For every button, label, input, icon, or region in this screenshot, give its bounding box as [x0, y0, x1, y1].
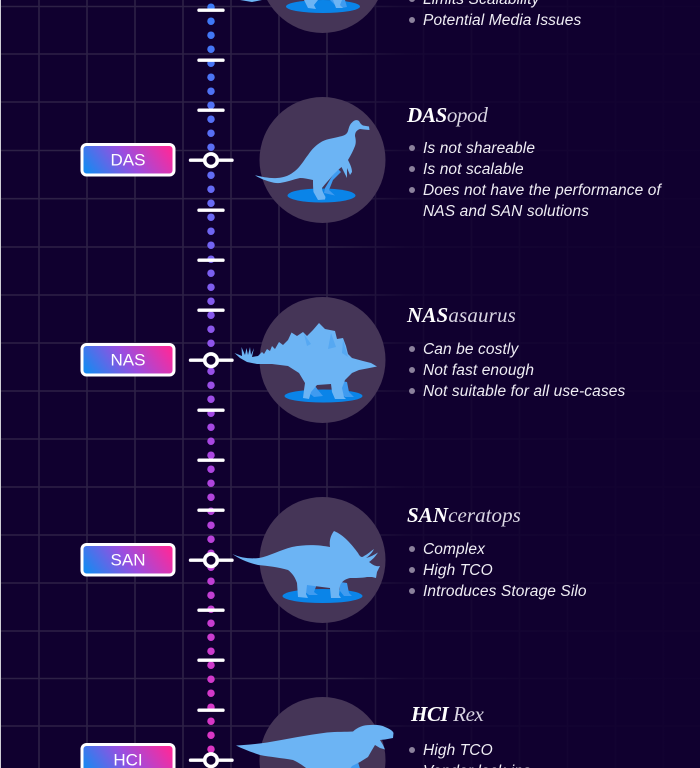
text: HCI Rex [409, 702, 531, 768]
label: DAS: DAS [111, 150, 145, 170]
text: NASasaurus: Not fast enough [423, 362, 534, 379]
label: NAS: NAS [111, 350, 145, 370]
icon: partial dinosaur at top [240, 0, 386, 33]
heading: SANceratops: SANceratops [407, 503, 521, 527]
label: HCI [82, 744, 174, 768]
icon: HCI dinosaur [236, 697, 394, 768]
timeline [190, 7, 232, 768]
text: SANceratops: Complex [423, 541, 486, 558]
text: SANceratops: Introduces Storage Silo [423, 583, 587, 600]
text: top entry tail [409, 0, 582, 29]
icon: NAS dinosaur [234, 297, 386, 423]
text: NASasaurus [406, 303, 625, 400]
text: DASopod: Does not have the performance of [423, 182, 662, 199]
label: NAS [82, 344, 174, 375]
icon: DAS dinosaur [255, 97, 386, 223]
label: DAS [82, 144, 174, 175]
heading: HCI Rex: HCI Rex [410, 702, 485, 726]
text: NASasaurus: Can be costly [423, 341, 519, 358]
text: NASasaurus: Not suitable for all use-cases [423, 383, 625, 400]
text: SANceratops: High TCO [423, 562, 493, 579]
text: DASopod: NAS and SAN solutions [423, 203, 589, 220]
marker: NAS [190, 354, 232, 367]
text: DASopod: Is not scalable [423, 161, 524, 178]
marker: DAS [190, 154, 232, 166]
text: DASopod: Is not shareable [423, 140, 535, 157]
text: HCI Rex: High TCO [423, 742, 493, 759]
heading: DASopod: DASopod [406, 103, 488, 127]
text: top entry tail: Potential Media Issues [423, 12, 582, 29]
text: SANceratops [407, 503, 587, 600]
label: SAN [82, 544, 174, 575]
label: SAN: SAN [111, 550, 145, 570]
icon: SAN dinosaur [232, 497, 386, 623]
minor ticks [199, 10, 223, 710]
heading: NASasaurus: NASasaurus [406, 303, 516, 327]
marker: SAN [190, 554, 232, 566]
timeline dots [207, 7, 215, 768]
marker: HCI [190, 754, 232, 766]
text: DASopod [406, 103, 662, 220]
